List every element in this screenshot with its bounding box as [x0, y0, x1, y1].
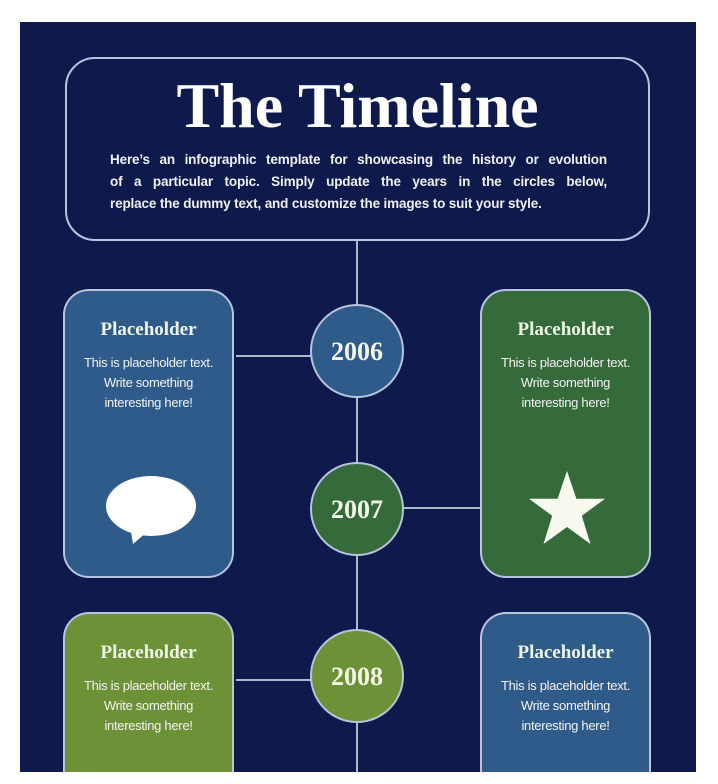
year circle 2008: 2008 — [331, 662, 383, 691]
year circle 2007: 2007 — [331, 495, 383, 524]
year circle 2007 — [310, 462, 404, 556]
intro text: Here’s an infographic template for showcasing the history or evolution — [110, 152, 607, 167]
intro text — [110, 152, 607, 211]
card: 2008 left: Write something — [104, 698, 193, 713]
card: 2006 left: interesting here! — [104, 395, 193, 410]
icon: speech bubble — [106, 476, 196, 544]
card: 2008 left: Placeholder — [100, 642, 197, 663]
intro text: replace the dummy text, and customize the images to suit your style. — [110, 196, 542, 211]
card: right blue: interesting here! — [521, 718, 610, 733]
intro text: of a particular topic. Simply update the years in the circles below, — [110, 174, 607, 189]
bottom white strip — [0, 772, 718, 784]
card: 2007 right: This is placeholder text. — [501, 355, 630, 370]
card: 2006 left: Write something — [104, 375, 193, 390]
card: 2007 right: interesting here! — [521, 395, 610, 410]
card: 2007 right — [480, 289, 651, 578]
card: 2006 left — [63, 289, 234, 578]
timeline vertical line — [356, 240, 358, 780]
year circle 2006 — [310, 304, 404, 398]
title box — [65, 57, 650, 241]
icon: star — [529, 471, 605, 544]
card: 2006 left: This is placeholder text. — [84, 355, 213, 370]
card: 2007 right: Write something — [521, 375, 610, 390]
card: 2007 right: Placeholder — [517, 319, 614, 340]
card: 2008 left — [63, 612, 234, 784]
card: 2006 left: Placeholder — [100, 319, 197, 340]
card: right blue: Write something — [521, 698, 610, 713]
card: right blue — [480, 612, 651, 784]
card: 2008 left: This is placeholder text. — [84, 678, 213, 693]
year circle 2008 — [310, 629, 404, 723]
year circle 2006: 2006 — [331, 337, 383, 366]
card: 2008 left: interesting here! — [104, 718, 193, 733]
card: right blue: This is placeholder text. — [501, 678, 630, 693]
title: The Timeline — [176, 70, 539, 141]
connector lines — [236, 355, 312, 357]
card: right blue: Placeholder — [517, 642, 614, 663]
